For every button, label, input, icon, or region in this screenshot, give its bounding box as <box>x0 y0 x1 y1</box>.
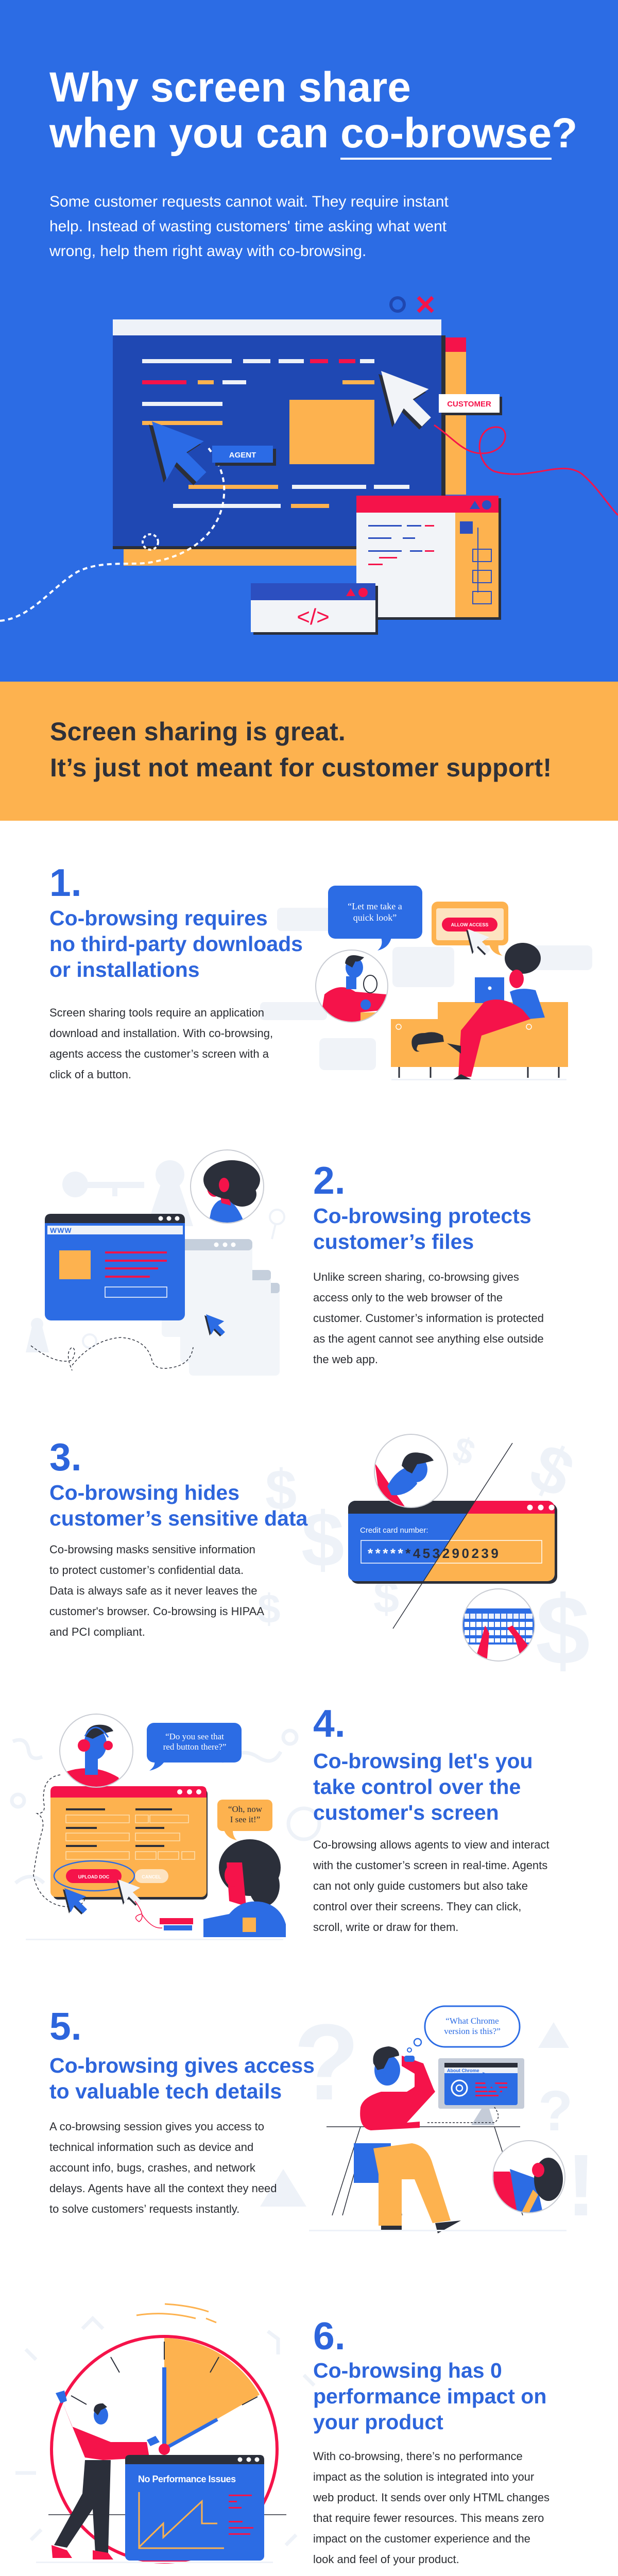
section 3 illustration: ******453290239 <box>368 1546 501 1561</box>
section 3 illustration: $ <box>448 1429 480 1473</box>
body 3: customer's browser. Co-browsing is HIPAA <box>49 1605 264 1618</box>
heading 3: Co-browsing hides <box>49 1481 239 1504</box>
body 2: the web app. <box>313 1353 378 1366</box>
heading 2 <box>313 1204 531 1253</box>
body 4: can not only guide customers but also take <box>313 1879 528 1892</box>
section 4 illustration: “Oh, now <box>228 1804 263 1814</box>
body 6: look and feel of your product. <box>313 2553 459 2566</box>
hero title: when you can co-browse? <box>49 110 577 157</box>
body 1: click of a button. <box>49 1068 131 1081</box>
body 5: technical information such as device and <box>49 2141 253 2154</box>
section 1 illustration: quick look” <box>353 912 397 923</box>
number 5: 5. <box>49 2005 82 2048</box>
heading 1: no third-party downloads <box>49 932 303 956</box>
body 3: and PCI compliant. <box>49 1625 145 1638</box>
section 6 illustration: No Performance Issues <box>138 2474 236 2484</box>
heading 2: customer’s files <box>313 1230 474 1253</box>
body 6: web product. It sends over only HTML changes <box>313 2491 550 2504</box>
section 4 illustration <box>12 1714 319 1940</box>
body 2: customer. Customer’s information is protected <box>313 1312 544 1325</box>
section 3 illustration: $ <box>265 1459 297 1522</box>
body 6 <box>313 2450 550 2566</box>
body 4: Co-browsing allows agents to view and interact <box>313 1838 550 1851</box>
heading 4: Co-browsing let's you <box>313 1749 533 1773</box>
section 2 illustration: WWW <box>50 1226 72 1234</box>
section 1 illustration: ALLOW ACCESS <box>451 922 488 927</box>
hero intro text: Some customer requests cannot wait. They require instant <box>49 193 449 210</box>
section 5 illustration: “What Chrome <box>445 2016 499 2026</box>
heading 5: Co-browsing gives access <box>49 2054 315 2077</box>
section 6 <box>313 2314 550 2566</box>
body 5: A co-browsing session gives you access to <box>49 2120 264 2133</box>
section 2 illustration <box>26 1150 284 1376</box>
section 3 illustration: $ <box>536 1576 590 1685</box>
heading 6: Co-browsing has 0 <box>313 2359 502 2382</box>
section 3 illustration: $ <box>373 1571 399 1623</box>
hero illustration: </> <box>297 604 330 630</box>
body 1: download and installation. With co-browsing, <box>49 1027 273 1040</box>
heading 3: customer’s sensitive data <box>49 1506 307 1530</box>
section 3 <box>49 1435 308 1638</box>
body 5: to solve customers’ requests instantly. <box>49 2202 239 2215</box>
section 5 illustration: ? <box>294 2002 359 2123</box>
body 2: access only to the web browser of the <box>313 1291 503 1304</box>
hero title <box>49 64 577 160</box>
heading 6: your product <box>313 2410 443 2434</box>
hero intro text: wrong, help them right away with co-browsing. <box>49 243 366 260</box>
hero intro text <box>49 193 449 260</box>
body 4: scroll, write or draw for them. <box>313 1921 458 1934</box>
body 1: Screen sharing tools require an application <box>49 1006 264 1019</box>
body 3: to protect customer’s confidential data. <box>49 1564 244 1577</box>
hero background <box>0 0 618 682</box>
number 2: 2. <box>313 1159 346 1202</box>
section 3 illustration: $ <box>258 1586 280 1632</box>
orange banner heading <box>50 717 552 782</box>
body 6: that require fewer resources. This means zero <box>313 2512 544 2524</box>
heading 6: performance impact on <box>313 2384 546 2408</box>
section 5 <box>49 2005 315 2215</box>
section 3 illustration: $ <box>519 1428 585 1512</box>
section 3 illustration: $ <box>301 1496 344 1583</box>
section 4 <box>313 1702 550 1934</box>
section 1 illustration: “Let me take a <box>348 901 402 911</box>
heading 5 <box>49 2054 315 2103</box>
heading 6 <box>313 2359 546 2434</box>
section 5 illustration: ? <box>538 2079 573 2143</box>
section 5 illustration: ! <box>566 2137 596 2234</box>
body 3 <box>49 1543 264 1638</box>
body 4: control over their screens. They can click, <box>313 1900 521 1913</box>
section 5 illustration: version is this?” <box>444 2026 501 2036</box>
section 6 illustration <box>15 2304 314 2563</box>
section 1 illustration <box>260 886 592 1080</box>
body 2: Unlike screen sharing, co-browsing gives <box>313 1270 519 1283</box>
heading 4: customer's screen <box>313 1801 499 1824</box>
section 4 illustration: CANCEL <box>142 1874 161 1879</box>
hero title: Why screen share <box>49 64 411 111</box>
heading 3 <box>49 1481 308 1530</box>
section 4 illustration: red button there?” <box>163 1742 226 1752</box>
heading 2: Co-browsing protects <box>313 1204 531 1228</box>
section 1 <box>49 861 303 1081</box>
body 2 <box>313 1270 544 1366</box>
heading 1 <box>49 906 303 981</box>
body 5 <box>49 2120 277 2215</box>
hero illustration <box>0 297 618 635</box>
number 6: 6. <box>313 2314 346 2358</box>
hero intro text: help. Instead of wasting customers' time asking what went <box>49 218 447 235</box>
heading 1: or installations <box>49 958 200 981</box>
hero illustration: CUSTOMER <box>447 400 491 409</box>
section 4 illustration: I see it!” <box>230 1815 260 1824</box>
section 4 illustration: “Do you see that <box>165 1732 224 1741</box>
orange banner heading: Screen sharing is great. <box>50 717 346 746</box>
section 4 illustration: UPLOAD DOC <box>78 1874 110 1879</box>
body 4 <box>313 1838 550 1934</box>
section 3 illustration <box>258 1428 590 1685</box>
heading 5: to valuable tech details <box>49 2079 282 2103</box>
number 1: 1. <box>49 861 82 904</box>
body 5: account info, bugs, crashes, and network <box>49 2161 255 2174</box>
number 3: 3. <box>49 1435 82 1479</box>
body 1 <box>49 1006 273 1081</box>
body 6: impact on the customer experience and the <box>313 2532 530 2545</box>
section 2 <box>313 1159 544 1366</box>
body 1: agents access the customer’s screen with a <box>49 1047 269 1060</box>
orange banner background <box>0 682 618 821</box>
heading 4: take control over the <box>313 1775 521 1799</box>
hero illustration: AGENT <box>229 451 256 460</box>
number 4: 4. <box>313 1702 346 1745</box>
section 5 illustration: About Chrome <box>447 2068 479 2073</box>
body 4: with the customer’s screen in real-time. Agents <box>313 1859 547 1872</box>
orange banner heading: It’s just not meant for customer support! <box>50 753 552 782</box>
heading 4 <box>313 1749 533 1824</box>
body 6: impact as the solution is integrated into your <box>313 2470 534 2483</box>
body 3: Co-browsing masks sensitive information <box>49 1543 255 1556</box>
section 3 illustration: Credit card number: <box>360 1526 428 1535</box>
section 5 illustration <box>260 2002 596 2234</box>
heading 1: Co-browsing requires <box>49 906 268 930</box>
body 2: as the agent cannot see anything else outside <box>313 1332 544 1345</box>
body 3: Data is always safe as it never leaves the <box>49 1584 258 1597</box>
body 6: With co-browsing, there’s no performance <box>313 2450 523 2463</box>
body 5: delays. Agents have all the context they need <box>49 2182 277 2195</box>
